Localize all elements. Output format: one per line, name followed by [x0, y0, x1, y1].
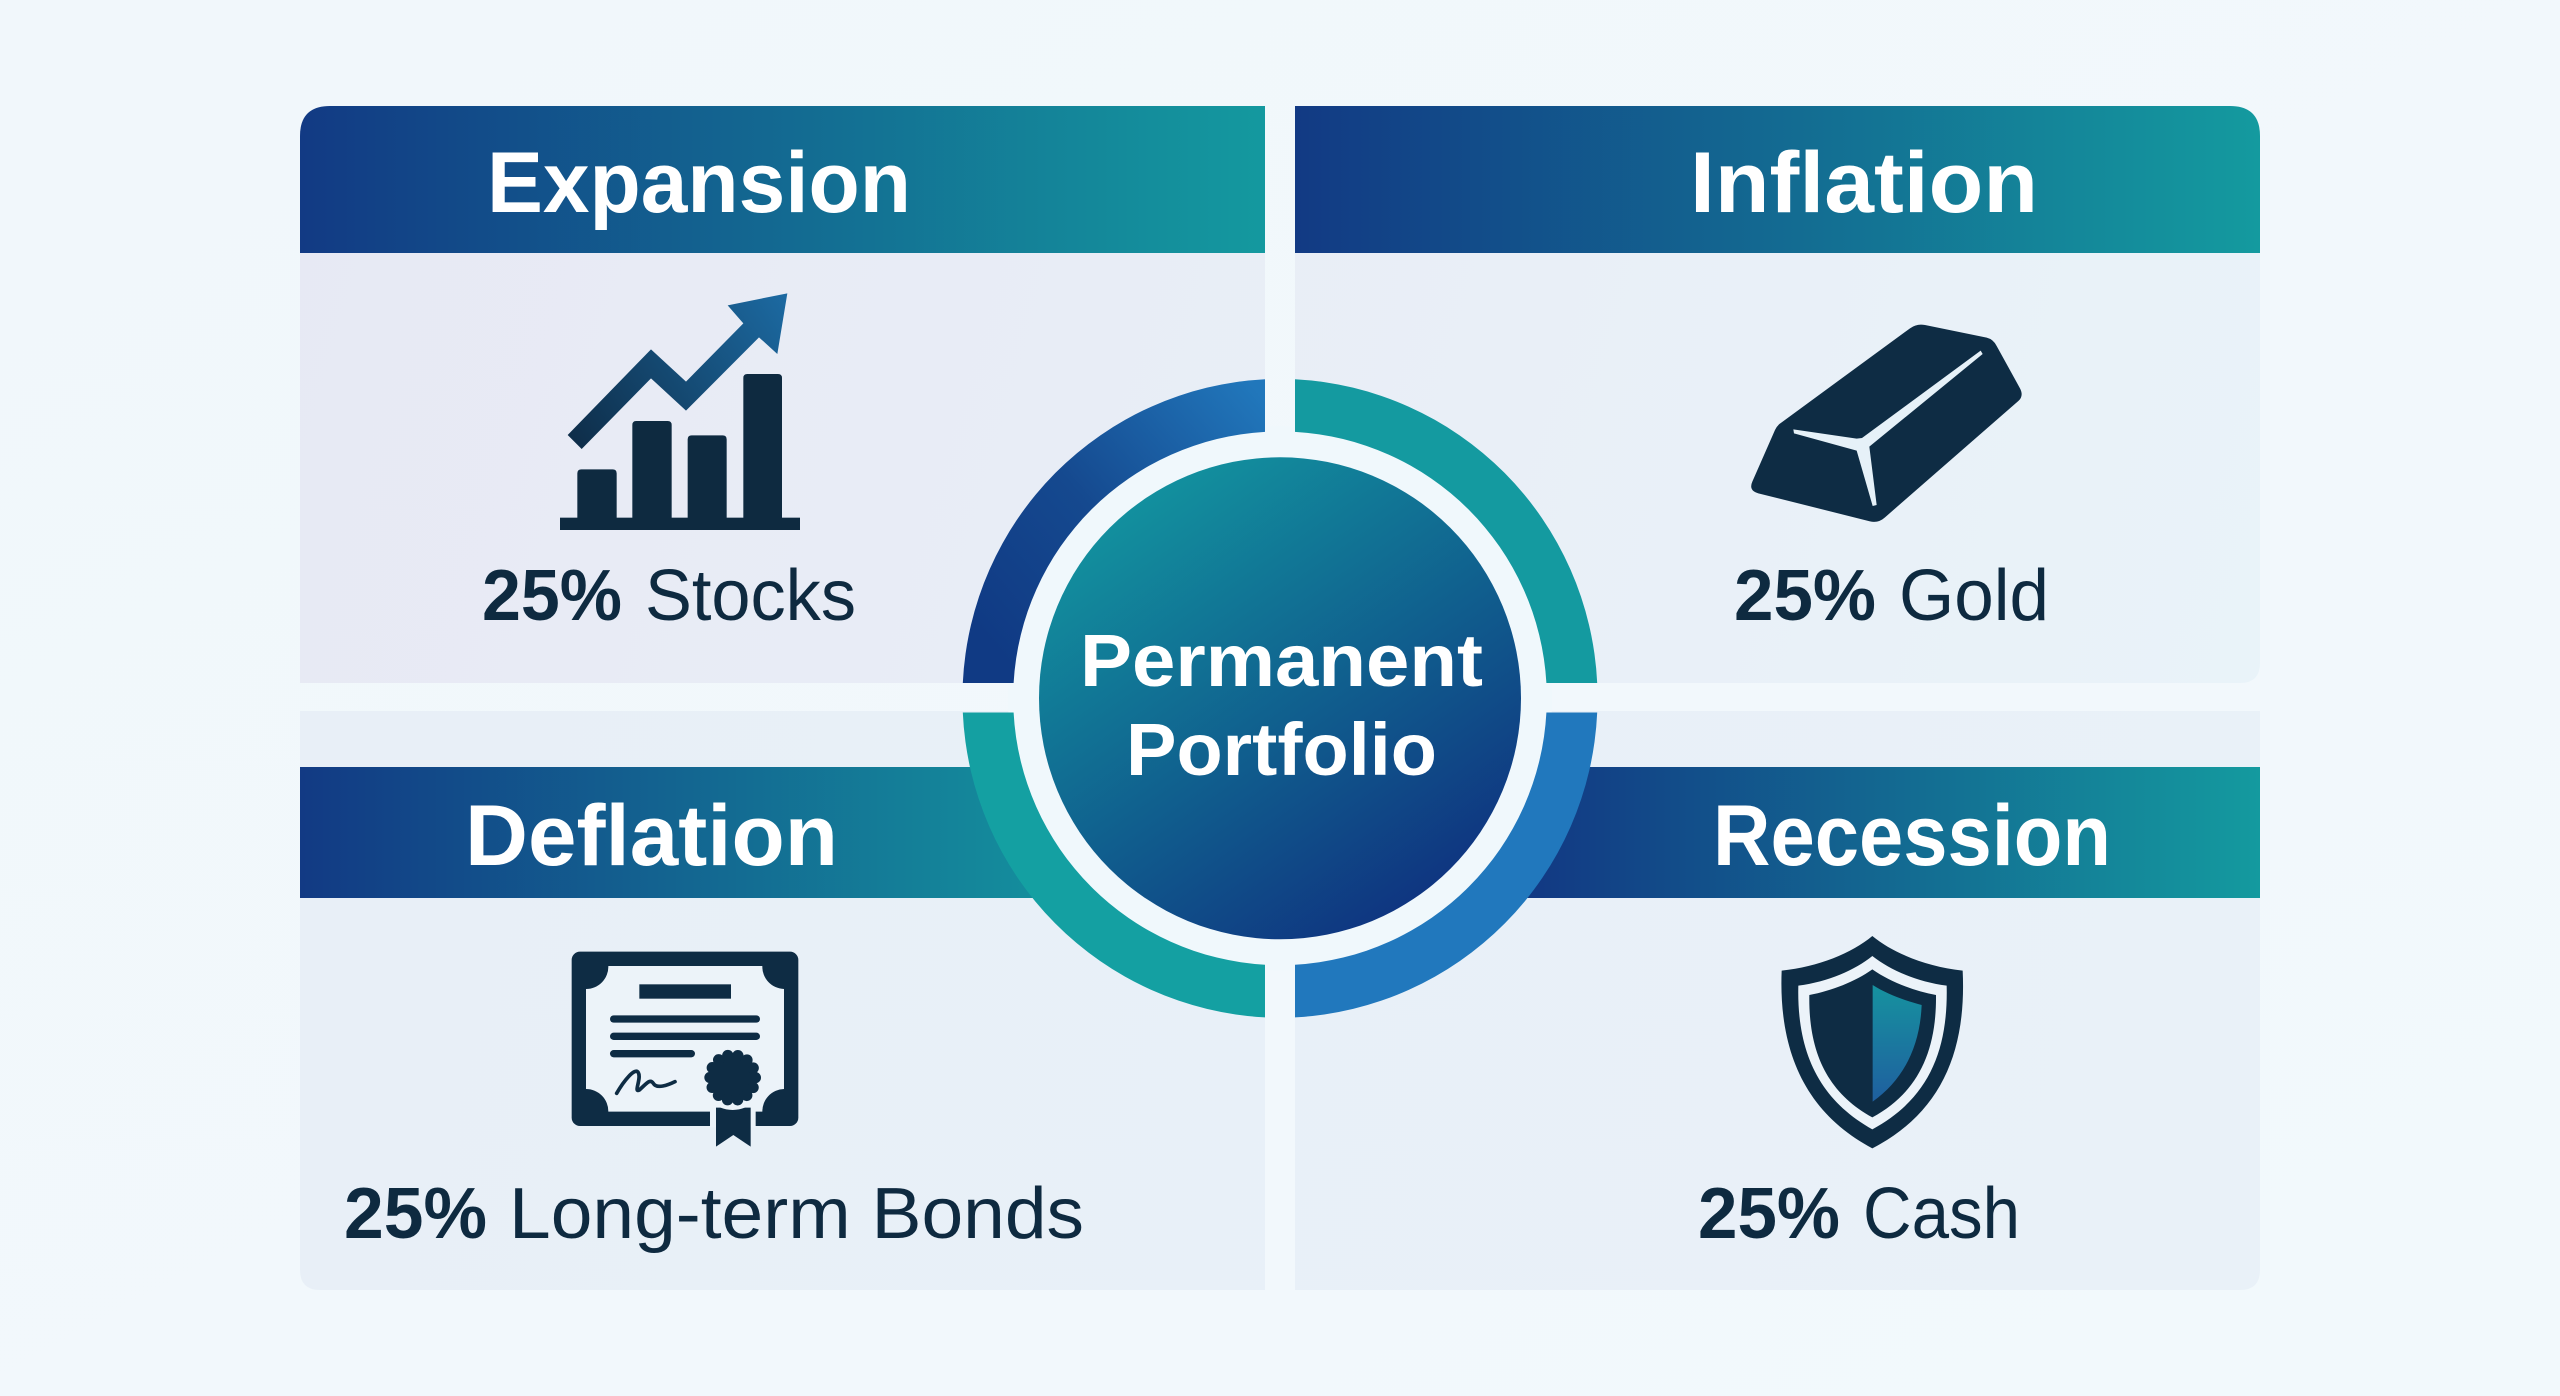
icon: bond certificate [572, 952, 798, 1147]
panel: deflation [300, 711, 1265, 1290]
label: 25% Stocks [482, 556, 856, 636]
label: 25% Cash [1698, 1174, 2020, 1254]
heading: Expansion: Expansion [487, 135, 911, 231]
title: Permanent Portfolio: Permanent [1080, 619, 1483, 702]
panel: expansion [300, 106, 1265, 683]
label: 25% Cash: Cash [1863, 1174, 2020, 1254]
ring segment: bottom right [1295, 712, 1597, 1017]
ring segment: top left [963, 379, 1265, 683]
panel: recession [1295, 711, 2260, 1290]
title: Permanent Portfolio [1080, 619, 1483, 791]
label: 25% Long-term Bonds: 25% [344, 1174, 487, 1254]
label: 25% Long-term Bonds: Long-term Bonds [509, 1174, 1084, 1254]
heading: Recession: Recession [1713, 788, 2111, 884]
label: 25% Gold [1734, 556, 2049, 636]
expansion header bar [300, 106, 1265, 253]
label: 25% Cash: 25% [1698, 1174, 1840, 1254]
label: 25% Gold: 25% [1734, 556, 1876, 636]
heading: Inflation: Inflation [1690, 135, 2038, 231]
deflation header bar [300, 767, 1060, 898]
icon: shield [1781, 936, 1963, 1148]
recession header bar [1500, 767, 2260, 898]
centre circle [1039, 457, 1521, 939]
ring segment: bottom left [963, 712, 1265, 1017]
panel: inflation [1295, 106, 2260, 683]
icon: gold bar [1751, 325, 2022, 522]
label: 25% Stocks: 25% [482, 556, 622, 636]
heading: Deflation: Deflation [465, 788, 838, 884]
inflation header bar [1295, 106, 2260, 253]
label: 25% Gold: Gold [1899, 556, 2049, 636]
title: Permanent Portfolio: Portfolio [1126, 708, 1437, 791]
icon: rising bar chart with arrow [560, 293, 800, 530]
label: 25% Stocks: Stocks [645, 556, 856, 636]
central ring and portfolio badge [963, 379, 1597, 1017]
ring segment: top right [1295, 379, 1597, 683]
